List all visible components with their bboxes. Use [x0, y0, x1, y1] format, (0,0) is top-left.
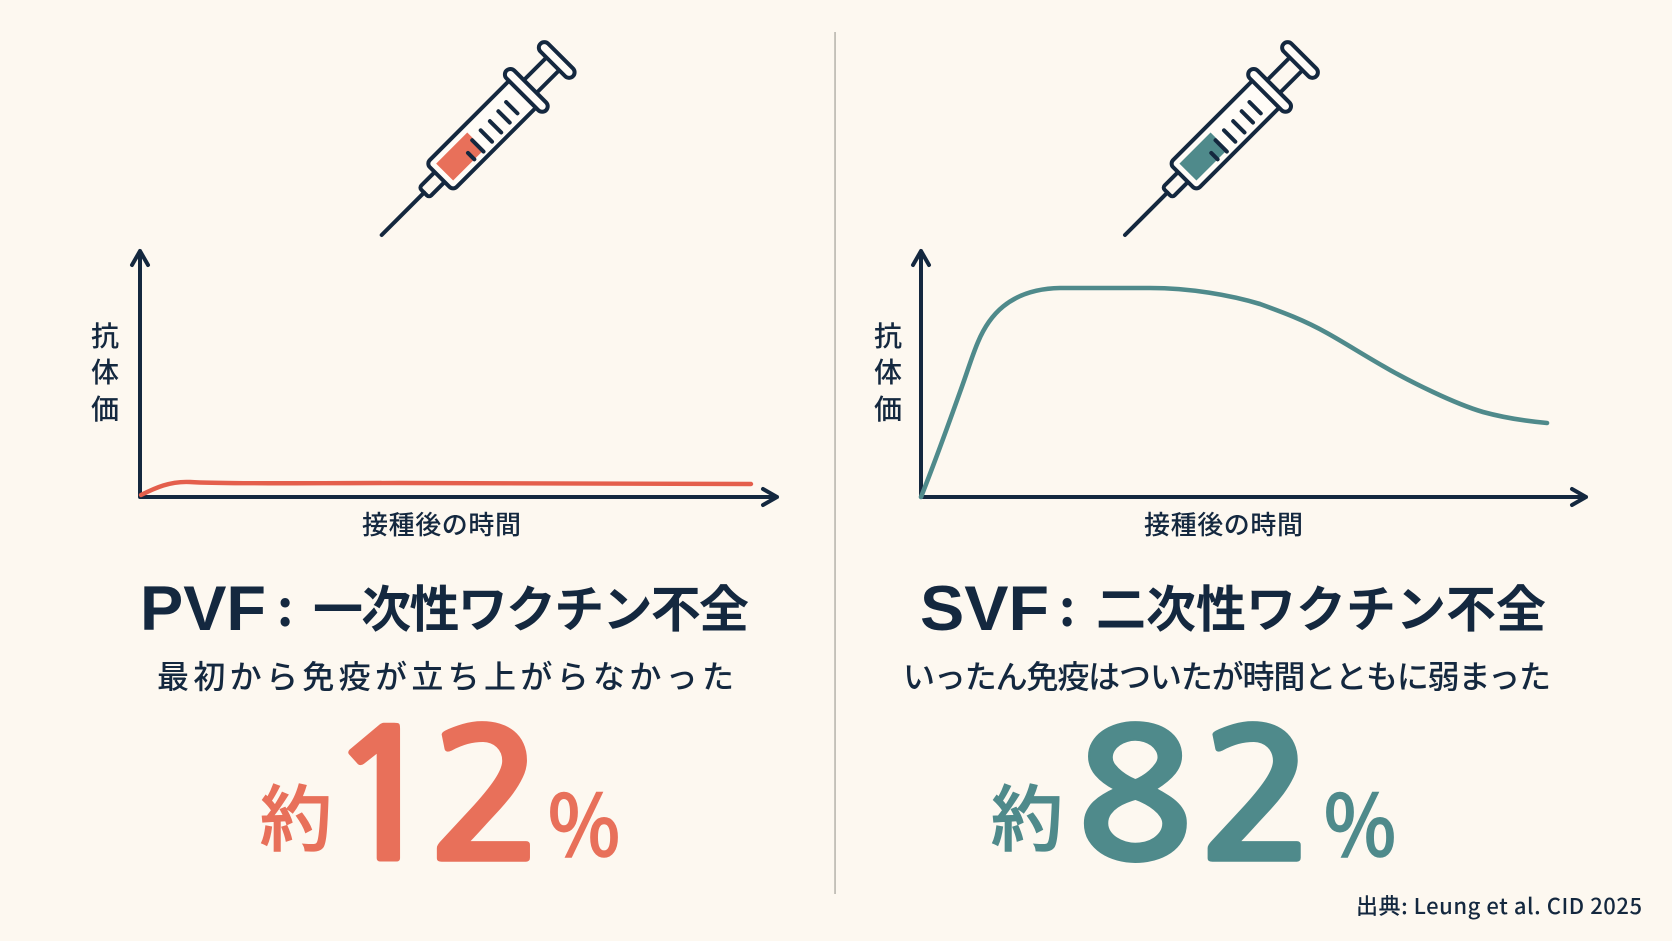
stat: about 12 percent — [260, 710, 620, 888]
heading: PVF — [140, 569, 749, 644]
y axis label: 価 — [874, 388, 902, 428]
stat: about 82 percent: 82 — [1074, 710, 1317, 888]
axes — [132, 251, 777, 505]
heading: SVF — [920, 569, 1546, 644]
panel: SVF — [874, 36, 1586, 888]
stat: about 12 percent: % — [548, 758, 620, 881]
stat: about 82 percent — [991, 710, 1396, 888]
y axis label: 体 — [91, 351, 119, 391]
stat: about 12 percent: 約 — [260, 761, 332, 866]
chart: SVF antibody titer — [874, 251, 1586, 542]
citation: 出典: Leung et al. CID 2025 — [1356, 889, 1642, 921]
stat: about 82 percent: % — [1324, 758, 1396, 881]
curve: rise then waning — [921, 288, 1547, 497]
y axis label: 抗 — [874, 315, 902, 355]
panel: PVF — [91, 36, 777, 888]
icon: syringe with teal fill — [1105, 36, 1324, 255]
y axis label: 価 — [91, 388, 119, 428]
x axis label: 接種後の時間 — [362, 505, 521, 542]
heading: PVF: : — [277, 569, 293, 641]
heading: PVF: PVF — [140, 574, 266, 644]
axes — [913, 251, 1586, 505]
subtitle: PVF: 最初から免疫が立ち上がらなかった — [157, 652, 734, 698]
heading: SVF: : — [1059, 569, 1075, 641]
x axis label: 接種後の時間 — [1144, 505, 1303, 542]
heading: PVF: 一次性ワクチン不全 — [313, 570, 749, 642]
y axis label — [874, 315, 902, 428]
stat: about 12 percent: 12 — [324, 710, 547, 888]
y axis label: 体 — [874, 351, 902, 391]
heading: SVF: SVF — [920, 574, 1049, 644]
icon: syringe with coral fill — [362, 36, 580, 255]
y axis label: 抗 — [91, 315, 119, 355]
chart: PVF antibody titer — [91, 251, 777, 542]
stat: about 82 percent: 約 — [991, 761, 1063, 866]
y axis label — [91, 315, 119, 428]
heading: SVF: 二次性ワクチン不全 — [1096, 570, 1546, 642]
curve: low flat response — [141, 482, 751, 495]
subtitle: SVF: いったん免疫はついたが時間とともに弱まった — [903, 652, 1551, 698]
